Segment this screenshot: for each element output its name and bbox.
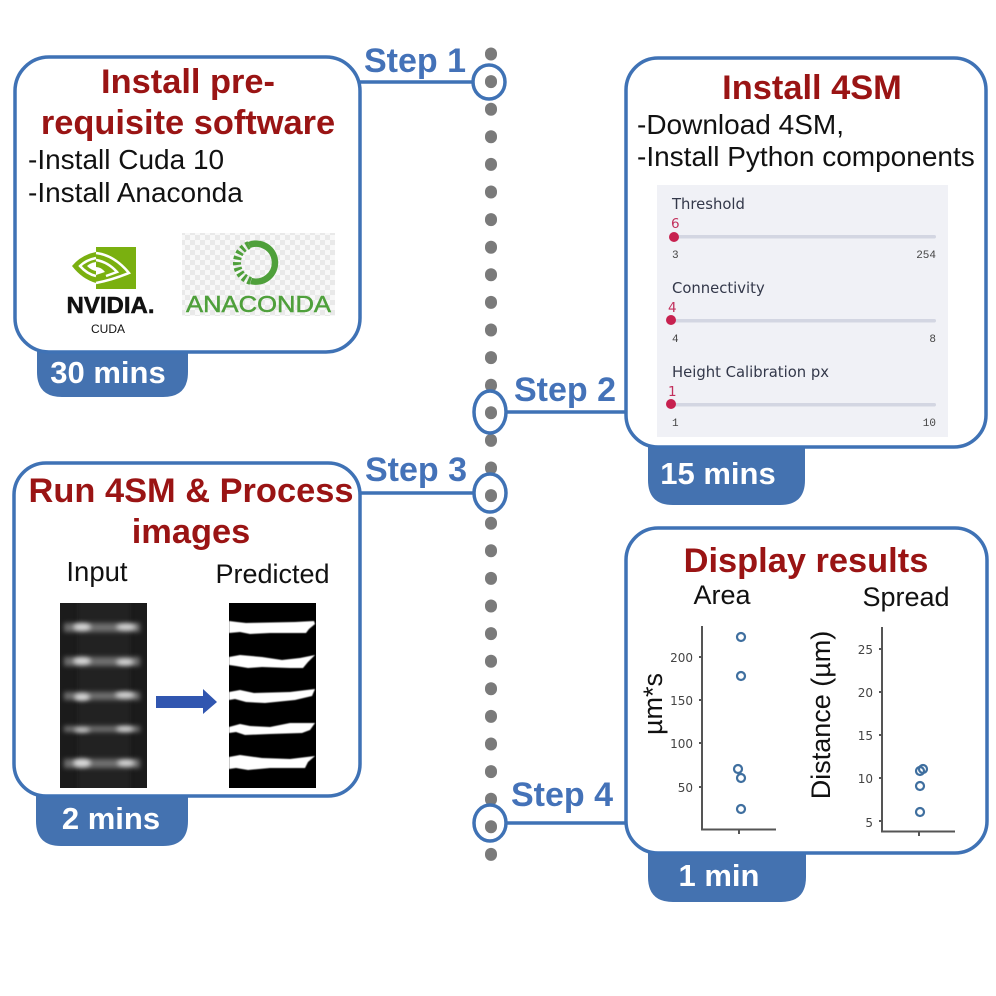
chart: spread: Distance (µm) xyxy=(806,631,836,799)
step 2 marker and connector xyxy=(474,371,626,433)
label: predicted: Predicted xyxy=(215,559,330,589)
step 1 marker and connector: Step 1 xyxy=(364,42,466,80)
step 4 marker and connector xyxy=(474,776,626,841)
chart: spread: 15 xyxy=(858,729,873,743)
icon: NVIDIA CUDA logo: NVIDIA. xyxy=(66,292,154,318)
step 4 marker and connector: Step 4 xyxy=(511,776,613,814)
predicted mask image xyxy=(229,603,316,788)
time tab: 1 min: 1 min xyxy=(679,858,759,893)
slider: height calibration xyxy=(666,364,936,430)
input microscopy image xyxy=(60,595,147,795)
slider: threshold: Threshold xyxy=(671,196,745,213)
screenshot: sliders xyxy=(657,185,948,437)
slider: connectivity: 8 xyxy=(929,334,936,346)
heading: Display results xyxy=(684,542,928,580)
chart: spread: 20 xyxy=(858,686,873,700)
install steps: -Install Python components xyxy=(637,141,975,172)
slider: height calibration: 1 xyxy=(668,384,677,400)
chart: area xyxy=(638,580,776,834)
panel: display results xyxy=(626,528,987,902)
panel: install 4SM xyxy=(626,58,986,505)
label: input: Input xyxy=(66,556,128,587)
arrow xyxy=(156,689,217,714)
slider: threshold: 6 xyxy=(671,216,680,232)
slider: threshold: 3 xyxy=(672,250,679,262)
time tab: 1 min xyxy=(648,851,806,902)
chart: area: Area xyxy=(693,580,751,610)
slider: connectivity: Connectivity xyxy=(672,280,765,297)
chart: area: 150 xyxy=(670,694,693,708)
time tab: 15 mins: 15 mins xyxy=(660,456,776,491)
icon: Anaconda logo: ANACONDA xyxy=(186,291,332,317)
chart: spread: 25 xyxy=(858,643,873,657)
icon: NVIDIA CUDA logo xyxy=(66,247,154,336)
panel: run 4SM and process images xyxy=(14,463,360,846)
slider: height calibration: Height Calibration px xyxy=(672,364,829,381)
time tab: 2 mins: 2 mins xyxy=(62,801,160,836)
chart: area: 200 xyxy=(670,651,693,665)
slider: threshold xyxy=(669,196,936,262)
slider: height calibration: 1 xyxy=(672,418,679,430)
slider: height calibration: 10 xyxy=(923,418,936,430)
heading: requisite software xyxy=(41,104,335,142)
heading: Run 4SM & Process xyxy=(29,472,353,510)
chart: spread: 10 xyxy=(858,772,873,786)
chart: area: 50 xyxy=(678,781,693,795)
software list: -Install Anaconda xyxy=(28,177,243,208)
step 1 marker and connector xyxy=(360,42,505,99)
slider: connectivity: 4 xyxy=(668,300,677,316)
install steps: -Download 4SM, xyxy=(637,109,844,140)
time tab: 30 mins: 30 mins xyxy=(50,355,166,390)
panel: install prerequisite software xyxy=(15,57,360,397)
slider: connectivity: 4 xyxy=(672,334,679,346)
slider: connectivity xyxy=(666,280,936,346)
heading: images xyxy=(132,513,250,551)
slider: threshold: 254 xyxy=(916,250,936,262)
chart: area: 100 xyxy=(670,737,693,751)
heading: Install pre- xyxy=(101,63,275,101)
time tab: 2 mins xyxy=(36,794,188,846)
timeline: dotted vertical line xyxy=(485,48,497,861)
icon: NVIDIA CUDA logo: CUDA xyxy=(91,322,125,336)
time tab: 30 mins xyxy=(37,350,188,397)
chart: spread xyxy=(806,582,955,836)
time tab: 15 mins xyxy=(648,445,805,505)
step 3 marker and connector xyxy=(360,451,506,512)
software list: -Install Cuda 10 xyxy=(28,144,224,175)
icon: Anaconda logo xyxy=(182,233,335,317)
heading: Install 4SM xyxy=(722,69,902,107)
step 3 marker and connector: Step 3 xyxy=(365,451,467,489)
step 2 marker and connector: Step 2 xyxy=(514,371,616,409)
chart: area: µm*s xyxy=(638,673,668,735)
chart: spread: 5 xyxy=(865,816,873,830)
chart: spread: Spread xyxy=(862,582,950,612)
